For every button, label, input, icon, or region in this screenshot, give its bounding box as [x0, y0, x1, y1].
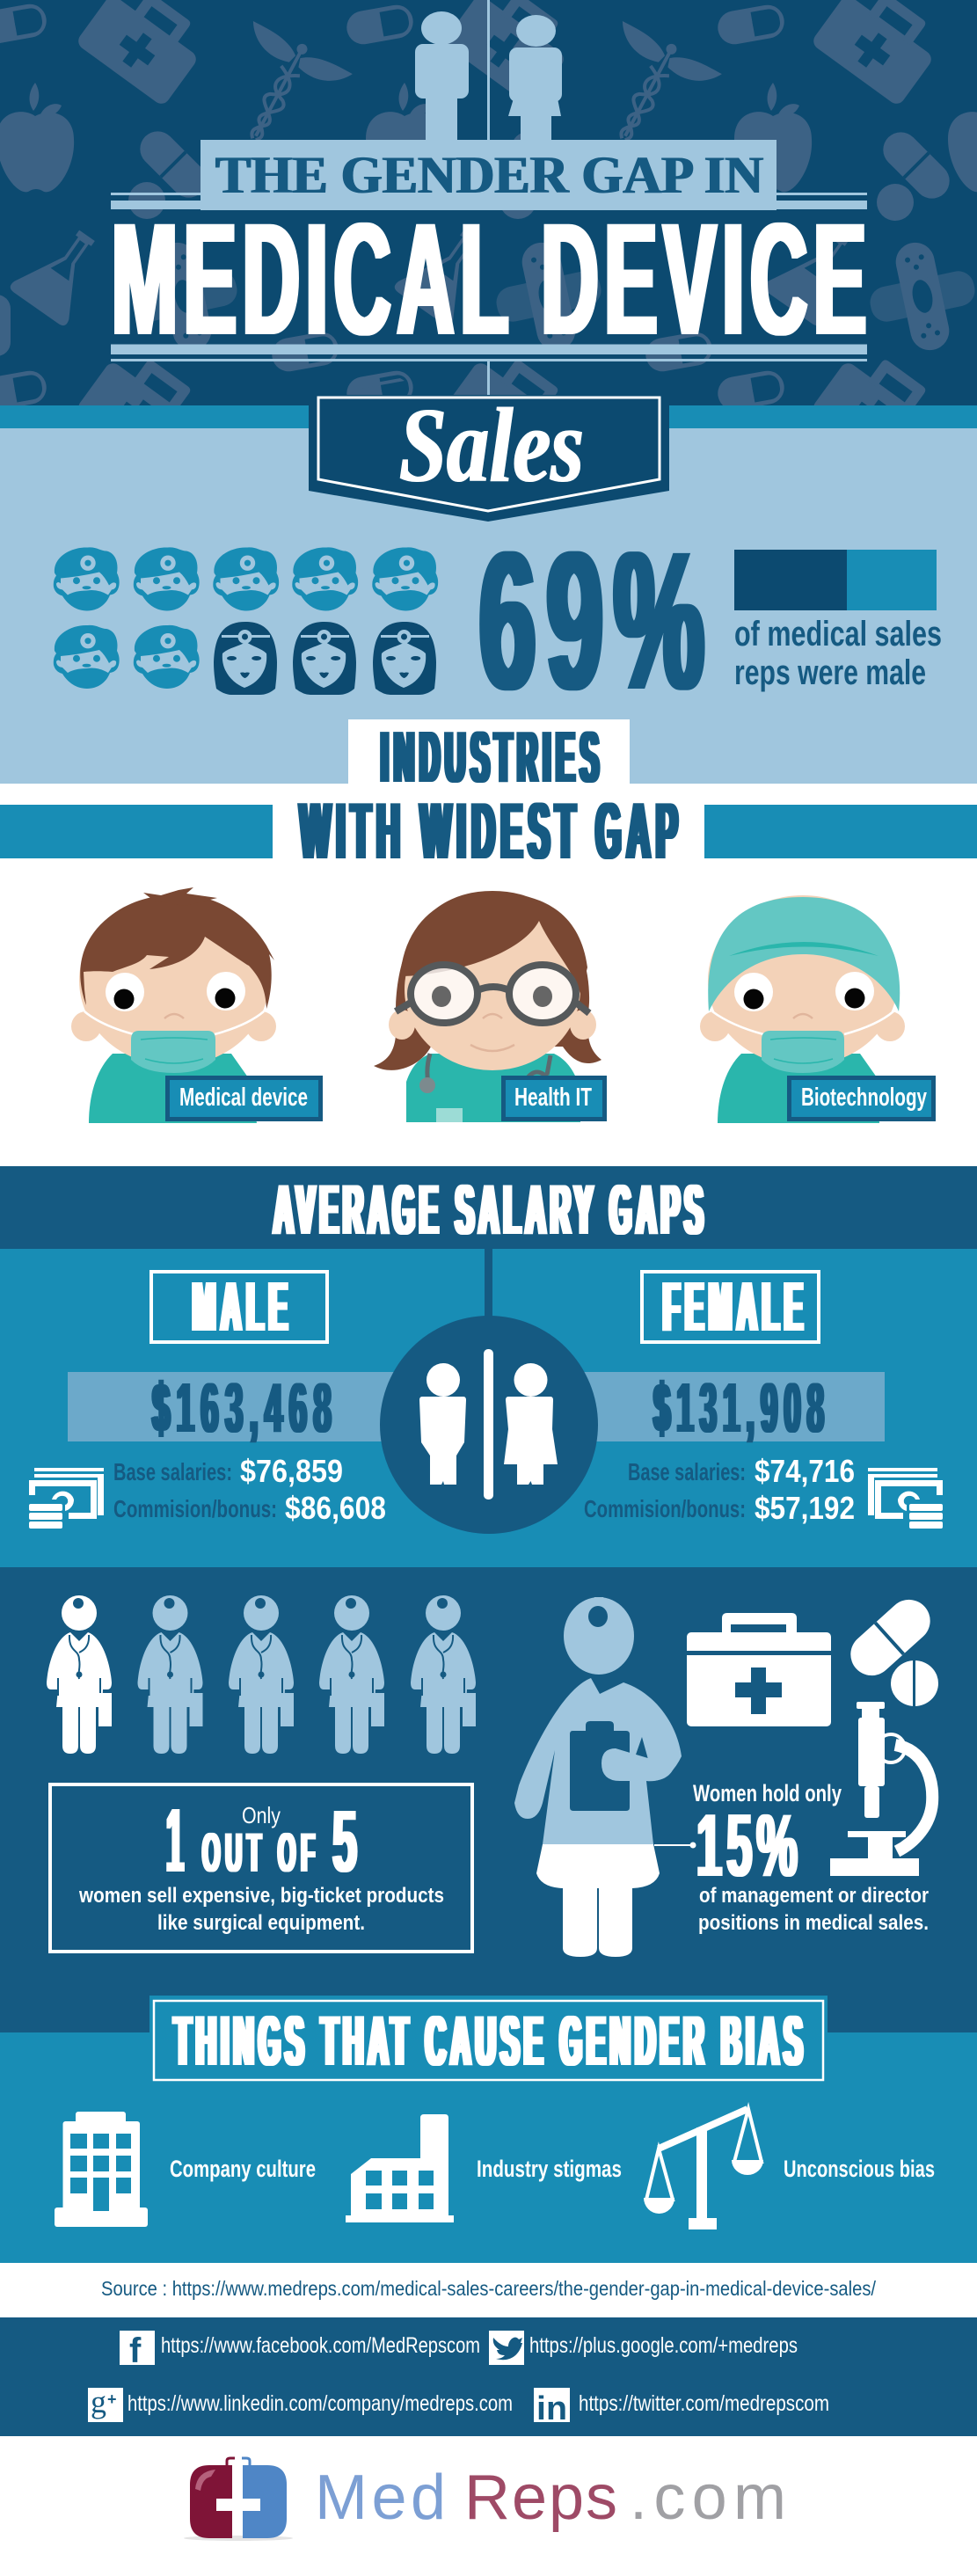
title lower rules — [111, 345, 867, 397]
icon: tablet — [891, 1659, 938, 1708]
icon: male figure — [415, 11, 469, 141]
male salary breakdown — [113, 1453, 386, 1526]
heading: with widest gap — [0, 787, 977, 876]
label: biotechnology — [787, 1076, 936, 1121]
male salary breakdown: Commision/bonus: — [113, 1495, 277, 1522]
title top banner — [111, 140, 867, 210]
source line: Source : https://www.medreps.com/medical-sales-careers/the-gender-gap-in-medical-device-sales/ — [101, 2277, 877, 2300]
panel: social links — [0, 2317, 977, 2436]
female salary breakdown — [584, 1453, 855, 1526]
panel: causes of gender bias — [0, 2032, 977, 2263]
label box: female — [642, 1267, 819, 1346]
panel: light blue statistic section — [0, 405, 977, 784]
icon: money right — [868, 1468, 943, 1529]
callout: 1 out of 5: 5 — [332, 1792, 357, 1891]
icon: factory — [346, 2114, 454, 2222]
logo: medreps — [184, 2458, 786, 2541]
panel: leadership section — [0, 1567, 977, 2033]
character: biotechnology — [700, 895, 936, 1123]
icon: microscope — [830, 1702, 932, 1876]
label: medical device: Medical device — [179, 1084, 308, 1112]
logo: medreps: Reps — [464, 2463, 617, 2533]
logo: medreps: Med — [315, 2463, 446, 2533]
icon: restroom circle — [380, 1316, 598, 1534]
label: medical device — [165, 1076, 323, 1121]
logo: medreps: .com — [630, 2463, 786, 2533]
link: facebook — [120, 2331, 480, 2370]
callout: 1 out of 5: Only — [242, 1802, 281, 1828]
callout: 1 out of 5 — [50, 1784, 472, 1952]
text: $163,468 — [152, 1368, 338, 1447]
icon: female figure — [508, 15, 562, 141]
male salary breakdown: $76,859 — [240, 1453, 343, 1489]
callout: 15 percent: Women hold only — [693, 1780, 842, 1806]
callout: 15 percent: positions in medical sales. — [698, 1911, 929, 1935]
link: linkedin — [534, 2388, 829, 2427]
male salary breakdown: Base salaries: — [113, 1458, 232, 1485]
icon: first aid kit — [687, 1613, 831, 1726]
callout: 1 out of 5: like surgical equipment. — [157, 1911, 365, 1935]
character: medical device — [71, 887, 323, 1123]
heading: industries — [348, 716, 630, 798]
link: twitter: https://plus.google.com/+medreps — [529, 2333, 798, 2358]
title top banner: THE GENDER GAP IN — [215, 146, 763, 204]
label box: male: MALE — [193, 1267, 293, 1346]
statistic 69%: 69% — [479, 511, 715, 731]
callout: 15 percent: 15% — [696, 1797, 802, 1895]
sales badge: Sales — [399, 386, 584, 505]
link: linkedin: https://twitter.com/medrepscom — [579, 2391, 829, 2416]
icon grid: male and female faces — [54, 547, 438, 695]
link: google plus: https://www.linkedin.com/company/medreps.com — [128, 2391, 513, 2416]
link: google plus: + — [107, 2390, 117, 2408]
link: google plus: g — [91, 2384, 106, 2419]
link: facebook: https://www.facebook.com/MedRepscom — [161, 2333, 480, 2358]
label: health IT — [501, 1076, 607, 1121]
link: facebook: f — [129, 2332, 142, 2370]
center connector line top — [487, 0, 490, 141]
link: google plus — [88, 2384, 513, 2422]
callout: 1 out of 5: OUT OF — [202, 1822, 320, 1884]
character: health IT — [374, 891, 607, 1122]
label box: male — [151, 1267, 327, 1346]
sales badge — [309, 386, 669, 522]
icon: large nurse with clipboard — [514, 1597, 682, 1957]
callout: 15 percent: of management or director — [699, 1884, 929, 1908]
female salary breakdown: Commision/bonus: — [584, 1495, 746, 1522]
label: health IT: Health IT — [514, 1084, 592, 1112]
callout: 1 out of 5: 1 — [166, 1790, 184, 1891]
callout: 15 percent — [693, 1780, 929, 1935]
female salary breakdown: $57,192 — [755, 1490, 855, 1526]
header panel with pattern — [0, 0, 977, 474]
statistic caption — [734, 615, 942, 692]
male salary breakdown: $86,608 — [285, 1490, 386, 1526]
panel: average salary gaps — [0, 1166, 977, 1567]
female salary breakdown: Base salaries: — [628, 1458, 746, 1485]
link: linkedin: in — [536, 2390, 567, 2427]
label: biotechnology: Biotechnology — [801, 1084, 927, 1112]
icon: capsule — [842, 1591, 939, 1684]
female salary breakdown: $74,716 — [755, 1453, 855, 1489]
label: company culture: Company culture — [170, 2156, 316, 2182]
icon: scales — [644, 2109, 763, 2229]
pointer line — [654, 1842, 696, 1849]
label: industry stigmas: Industry stigmas — [477, 2156, 622, 2182]
text: INDUSTRIES — [381, 716, 604, 798]
callout: 1 out of 5: women sell expensive, big-ticket products — [78, 1884, 444, 1908]
proportion bar — [734, 550, 937, 610]
icon: office building — [55, 2112, 148, 2227]
link: twitter — [489, 2331, 798, 2365]
icon row: five nurses — [47, 1595, 476, 1754]
icon: money left — [29, 1468, 104, 1529]
